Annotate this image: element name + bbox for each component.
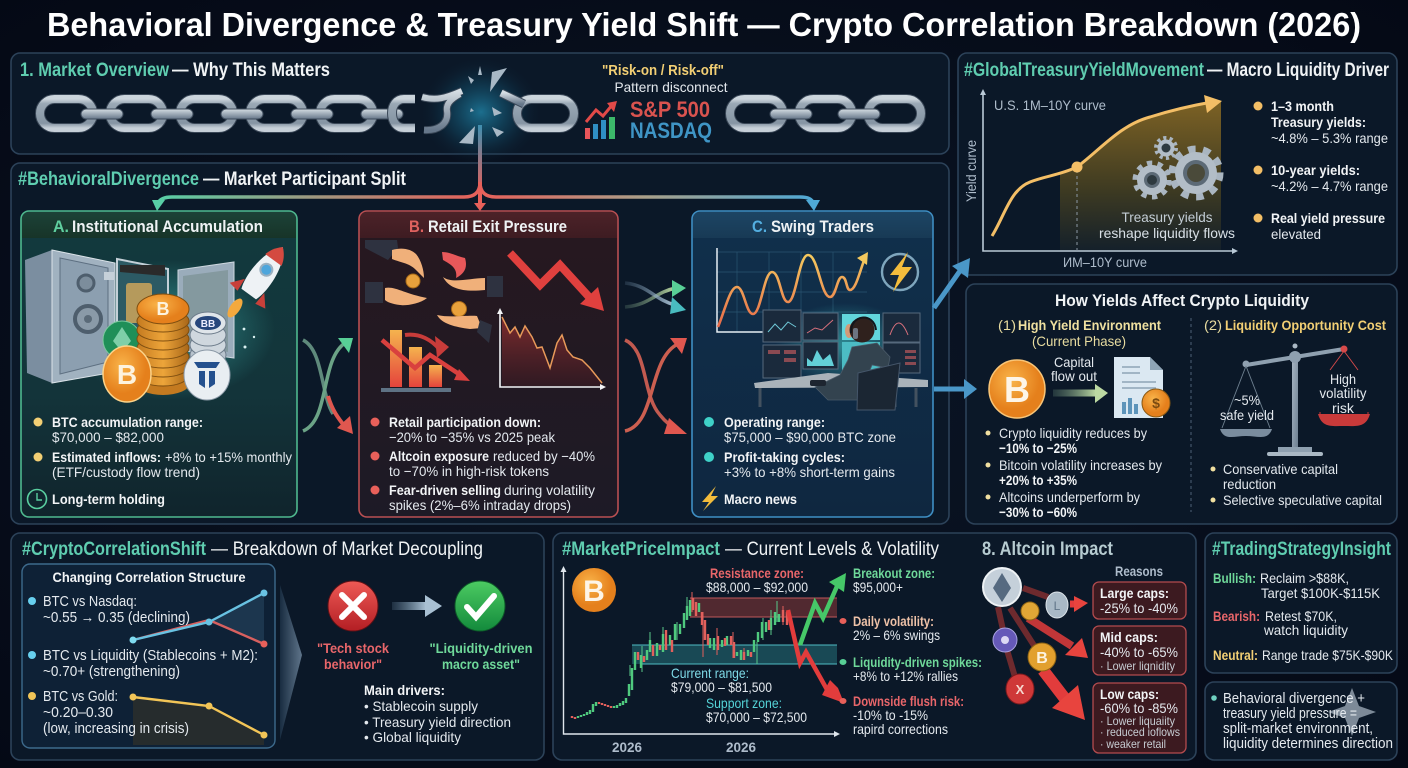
icon: bitcoin coin (989, 360, 1045, 418)
subhead: high yield: (1) (998, 317, 1016, 333)
icon: treasury document (1114, 357, 1170, 418)
panel: market price impact (553, 533, 1196, 760)
icon: sparkle (1328, 688, 1376, 736)
icon: chevron (280, 585, 302, 740)
icon: altcoin tokens: X (1016, 682, 1025, 697)
list: correlations: BTC vs Nasdaq: (43, 593, 137, 610)
panel: how yields affect crypto liquidity (966, 284, 1397, 524)
chart: swing line (717, 248, 868, 332)
icon: treasury document: $ (1152, 395, 1160, 411)
chart: falling area (497, 308, 606, 390)
list A: Estimated inflows: (52, 449, 161, 465)
list B: during volatility (504, 482, 595, 498)
box: low caps (1093, 683, 1186, 753)
scale label: safe yield: safe yield (1220, 407, 1274, 423)
scale label: high volatility risk: volatility (1320, 385, 1366, 401)
icon: coin stacks: BB (201, 319, 215, 330)
list C (702, 414, 896, 511)
box: large caps (1093, 582, 1186, 619)
list: yield ranges: 10-year yields: (1271, 162, 1360, 178)
list: main drivers: • Treasury yield direction (364, 714, 511, 730)
icon: trader at monitors (754, 303, 928, 410)
scale label: safe yield: ~5% (1234, 392, 1260, 408)
icon: red cross (328, 581, 378, 631)
icon: lightning badge (882, 252, 918, 292)
box: mid caps (1093, 626, 1186, 675)
heading: how yields: How Yields Affect Crypto Liquidity (1055, 291, 1309, 310)
subhead: opportunity cost: (2) (1204, 317, 1222, 333)
icon: coin stacks (103, 294, 230, 402)
list: correlations: ~0.55 → 0.35 (declining) (43, 609, 190, 626)
arrow: swing traders to yields effect (934, 379, 977, 399)
list: correlations: (low, increasing in crisis) (43, 720, 189, 737)
text: capital flow out: Capital (1054, 354, 1094, 370)
icon: altcoin tokens (983, 568, 1068, 704)
list: yield ranges: 1–3 month (1271, 98, 1334, 114)
list: correlations: ~0.20–0.30 (43, 704, 113, 721)
list: price callouts: rapird corrections (853, 721, 948, 737)
text: summary: Behavioral divergence + (1223, 690, 1365, 707)
line: bearish (1213, 608, 1348, 638)
list C: +3% to +8% short-term gains (724, 464, 895, 480)
axis label: top: U.S. 1M–10Y curve (994, 97, 1106, 113)
icon: altcoin tokens: L (1054, 599, 1061, 613)
icon: falling bar chart (381, 330, 470, 392)
text: capital flow out: flow out (1051, 368, 1097, 384)
arrow: B to C crossing upper (625, 280, 686, 314)
heading: correlation shift: #CryptoCorrelationShift (22, 539, 207, 560)
list B: reduced by −40% (493, 448, 595, 464)
label: resistance: Resistance zone: (710, 565, 804, 581)
text: NASDAQ: NASDAQ (630, 118, 712, 143)
axis labels: years: 2026 (726, 739, 756, 755)
label: current range (671, 665, 772, 695)
text: summary (1223, 690, 1393, 752)
text: summary: liquidity determines direction (1223, 735, 1393, 752)
header B: Retail Exit Pressure (428, 217, 567, 236)
scale label: safe yield (1220, 392, 1274, 423)
list: yield ranges: ~4.8% – 5.3% range (1271, 130, 1388, 146)
list C: Macro news (724, 491, 797, 507)
list C: Profit-taking cycles: (724, 449, 845, 465)
line: bearish: watch liquidity (1263, 622, 1348, 638)
box heading: Changing Correlation Structure (52, 569, 246, 585)
list: high yield effects: −30% to −60% (999, 504, 1077, 520)
icon: coin stacks: B (156, 299, 170, 319)
card B: retail exit pressure (359, 211, 618, 517)
list: high yield effects: +20% to +35% (999, 472, 1077, 488)
axis labels: years (612, 739, 756, 755)
arrow: capital flow (1053, 384, 1108, 403)
heading: market price impact: — Current Levels & Volatility (725, 539, 939, 560)
icon: chain shards (459, 66, 507, 144)
panel: market overview (11, 53, 949, 168)
heading: correlation shift: — Breakdown of Market Decoupling (211, 539, 483, 560)
header C: Swing Traders (771, 217, 874, 236)
arrow: A to B crossing (303, 338, 353, 434)
list: yield ranges: Treasury yields: (1271, 114, 1366, 130)
label: resistance (706, 565, 808, 595)
header B: B. (409, 217, 424, 236)
subhead: high yield: (Current Phase) (1032, 333, 1126, 349)
chart: correlation lines (130, 590, 268, 745)
list: main drivers: • Stablecoin supply (364, 698, 478, 714)
list: main drivers (364, 682, 511, 745)
label: support (706, 695, 807, 725)
icon: gears (1135, 138, 1220, 197)
heading: correlation shift (22, 539, 483, 560)
scale label: high volatility risk: High (1330, 371, 1356, 387)
box: low caps: · Lower liquaiity (1100, 714, 1175, 728)
arrow: swing traders to treasury (934, 258, 970, 308)
heading: market overview: — Why This Matters (172, 60, 330, 81)
panel: behavioral divergence (11, 125, 949, 524)
chart: yield curve (963, 89, 1238, 270)
list B: to −70% in high-risk tokens (389, 463, 549, 479)
list: opportunity cost effects: reduction (1223, 476, 1276, 492)
label: support: Support zone: (706, 695, 782, 711)
box: low caps: · reduced ioflows (1100, 725, 1180, 739)
list: yield ranges: ~4.2% – 4.7% range (1271, 178, 1388, 194)
icon: bitcoin coin: B (1004, 369, 1030, 410)
arrows: altcoin fall (998, 588, 1088, 720)
list: main drivers: • Global liquidity (364, 729, 461, 745)
line: neutral: Neutral: (1213, 647, 1258, 663)
line: neutral (1213, 647, 1394, 663)
icon: vault (25, 250, 275, 400)
box: mid caps: -40% to -65% (1100, 644, 1178, 660)
line: bullish: Bullish: (1213, 570, 1256, 586)
quote: liquidity-driven: macro asset" (442, 656, 520, 672)
icon: red falling arrow (510, 253, 604, 311)
arrow: shift (392, 595, 442, 617)
label: current range: $79,000 – $81,500 (671, 679, 772, 695)
list: opportunity cost effects: Selective speculative capital (1223, 492, 1382, 508)
caption: yields reshape flows: reshape liquidity flows (1099, 225, 1235, 241)
line: bearish: Bearish: (1213, 608, 1260, 624)
list: high yield effects: Crypto liquidity reduces by (999, 425, 1147, 441)
chart: price candles (560, 566, 840, 737)
arrow: split flow (152, 125, 820, 211)
quote: tech stock (317, 640, 389, 672)
subhead: opportunity cost: Liquidity Opportunity Cost (1225, 317, 1386, 333)
scale label: high volatility risk (1320, 371, 1366, 416)
list A: $70,000 – $82,000 (52, 429, 164, 445)
panel: correlation shift (11, 533, 544, 760)
caption: yields reshape flows: Treasury yields (1122, 209, 1212, 225)
label: reasons: Reasons (1115, 563, 1163, 579)
list A: +8% to +15% monthly (165, 449, 292, 465)
box: mid caps: · Lower liqnidity (1100, 659, 1175, 673)
label: current range: Current range: (671, 665, 749, 681)
arrow: downside (788, 610, 844, 703)
panel: trading strategy (1205, 533, 1397, 673)
list: correlations: ~0.70+ (strengthening) (43, 663, 180, 680)
heading: market price impact (562, 539, 939, 560)
text: pattern disconnect: Pattern disconnect (614, 79, 728, 95)
list: price callouts (840, 565, 982, 737)
box: low caps: Low caps: (1100, 686, 1159, 702)
label: support: $70,000 – $72,500 (706, 709, 807, 725)
list B: Retail participation down: (389, 414, 541, 430)
list B: Altcoin exposure (389, 448, 489, 464)
heading: market price impact: #MarketPriceImpact (562, 539, 721, 560)
icon: coin stacks: B (117, 359, 137, 390)
list C: $75,000 – $90,000 BTC zone (724, 429, 896, 445)
list: price callouts: -10% to -15% (853, 707, 928, 723)
text: summary: treasury yield pressure = (1223, 705, 1357, 722)
heading: market overview (20, 60, 330, 81)
label: resistance: $88,000 – $92,000 (706, 579, 808, 595)
list: yield ranges (1254, 98, 1388, 242)
line: bullish (1213, 570, 1381, 601)
icon: market chart (585, 101, 617, 139)
icon: hands and coins (365, 240, 503, 343)
list: price callouts: 2% – 6% swings (853, 627, 940, 643)
list: high yield effects: Altcoins underperform by (999, 489, 1140, 505)
list A: (ETF/custody flow trend) (52, 464, 200, 480)
list C: Operating range: (724, 414, 825, 430)
heading: behavioral divergence (18, 169, 407, 190)
caption: yields reshape flows (1099, 209, 1235, 241)
quote: liquidity-driven: "Liquidity-driven (430, 640, 532, 656)
list: yield ranges: elevated (1271, 226, 1321, 242)
list: yield ranges: Real yield pressure (1271, 210, 1385, 226)
card C: swing traders (692, 211, 933, 517)
icon: altcoin tokens: B (1036, 650, 1048, 667)
box: low caps: -60% to -85% (1100, 700, 1178, 716)
axis label: x: ИM–10Y curve (1063, 254, 1147, 270)
list A: BTC accumulation range: (52, 414, 203, 430)
list: high yield effects: Bitcoin volatility increases by (999, 457, 1162, 473)
quote: tech stock: "Tech stock (317, 640, 389, 656)
box: large caps: -25% to -40% (1100, 600, 1178, 616)
header C: C. (752, 217, 767, 236)
bullet (1211, 695, 1217, 701)
icon: chain right (730, 99, 921, 128)
icon: rocket (225, 234, 301, 348)
list: price callouts: Breakout zone: (853, 565, 935, 581)
list: price callouts: Liquidity-driven spikes: (853, 654, 982, 670)
box: mid caps: Mid caps: (1100, 629, 1158, 645)
header A: A. (53, 217, 69, 236)
icon: bitcoin badge: B (583, 575, 605, 608)
list: price callouts: Daily volatility: (853, 613, 934, 629)
box: low caps: · weaker retail (1100, 737, 1166, 751)
list: correlations: BTC vs Gold: (43, 688, 118, 705)
axis label: y: Yield curve (963, 140, 979, 202)
list A (28, 414, 292, 508)
header A: Institutional Accumulation (72, 217, 263, 236)
heading: treasury yield (964, 60, 1389, 81)
list B: spikes (2%–6% intraday drops) (389, 497, 571, 513)
list: opportunity cost effects: Conservative capital (1223, 461, 1338, 477)
list: price callouts: +8% to +12% rallies (853, 668, 958, 684)
heading: behavioral divergence: — Market Participant Split (203, 169, 407, 190)
panel: treasury yield (958, 53, 1397, 275)
list: correlations: BTC vs Liquidity (Stablecoins + M2): (43, 647, 258, 664)
list: high yield effects (986, 425, 1162, 520)
card A: institutional accumulation (21, 211, 301, 517)
burst glow (419, 56, 543, 168)
list: opportunity cost effects (1210, 461, 1382, 508)
list B (370, 414, 595, 513)
panel: summary (1205, 682, 1397, 760)
icon: broken chain left (40, 91, 462, 130)
list: price callouts: $95,000+ (853, 579, 903, 595)
quote: liquidity-driven (430, 640, 532, 672)
subhead: high yield (998, 317, 1161, 349)
scale label: high volatility risk: risk (1332, 400, 1355, 416)
line: bearish: Retest $70K, (1265, 608, 1337, 624)
line: bullish: Reclaim >$88K, (1260, 570, 1349, 586)
text: capital flow out (1051, 354, 1097, 384)
list B: Fear-driven selling (389, 482, 501, 498)
axis labels: years: 2026 (612, 739, 642, 755)
arrow: breakout (800, 573, 846, 645)
subhead: high yield: High Yield Environment (1018, 317, 1161, 333)
box: large caps: Large caps: (1100, 585, 1169, 601)
list: main drivers: Main drivers: (364, 682, 445, 698)
line: bullish: Target $100K-$115K (1261, 585, 1381, 601)
text: S&P 500: S&P 500 (630, 97, 710, 122)
list A: Long-term holding (52, 491, 165, 507)
title: Behavioral Divergence & Treasury Yield Shift — Crypto Correlation Breakdown (2026) (47, 6, 1361, 43)
arrow: B to C crossing lower (625, 338, 687, 434)
icon: green check (455, 581, 505, 631)
list: price callouts: Downside flush risk: (853, 693, 964, 709)
box: correlation structure (22, 564, 275, 748)
heading: market overview: 1. Market Overview (20, 60, 169, 81)
list: correlations (28, 593, 258, 737)
list B: −20% to −35% vs 2025 peak (389, 429, 556, 445)
icon: balance scale (1220, 344, 1370, 456)
heading: treasury yield: #GlobalTreasuryYieldMovement (964, 60, 1205, 81)
text: risk-on risk-off: "Risk-on / Risk-off" (602, 62, 724, 79)
quote: tech stock: behavior" (324, 656, 382, 672)
text: summary: split-market environment, (1223, 720, 1373, 737)
heading: altcoin impact: 8. Altcoin Impact (982, 539, 1114, 560)
list: high yield effects: −10% to −25% (999, 440, 1077, 456)
icon: bitcoin badge (572, 568, 616, 612)
heading: behavioral divergence: #BehavioralDivergence (18, 169, 199, 190)
icon: broken chain right (501, 93, 574, 128)
